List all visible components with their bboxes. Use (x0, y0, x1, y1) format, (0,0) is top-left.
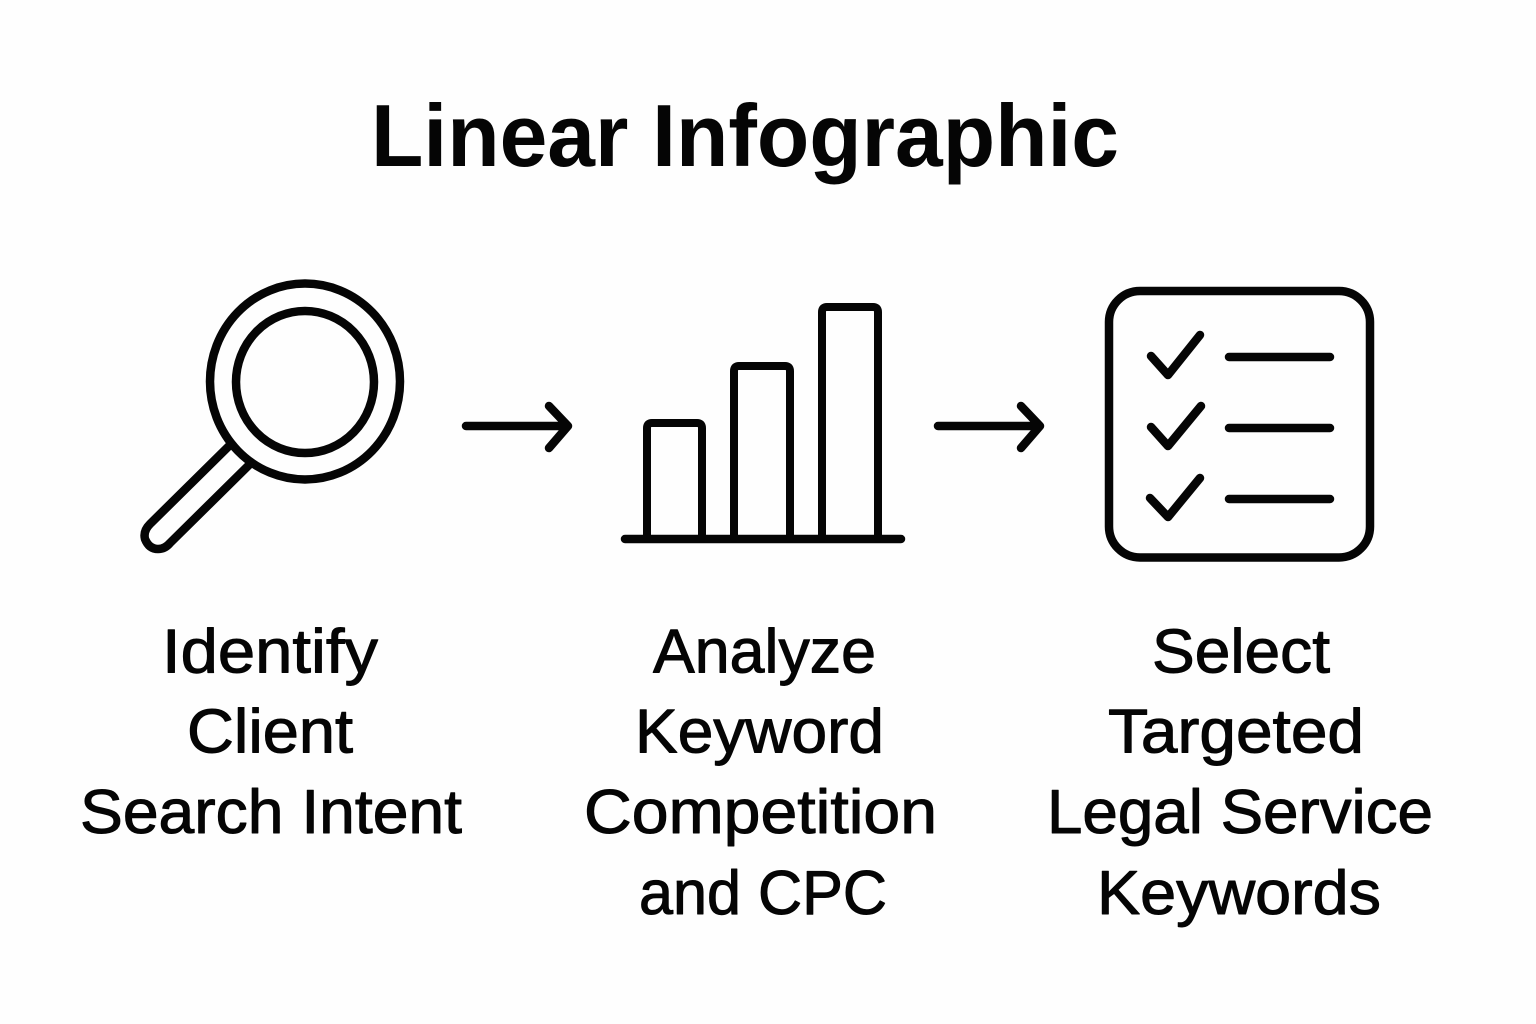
step 2 label: Analyze (653, 618, 876, 686)
step 2 label: Keyword (635, 698, 884, 766)
step 3 label (1047, 618, 1433, 928)
arrow: step 1 to step 2 (466, 406, 568, 448)
step 1 label (80, 618, 462, 847)
step 2 label: Competition (584, 778, 937, 847)
step 1 label: Identify (162, 618, 378, 686)
step 3 label: Targeted (1108, 698, 1364, 766)
icon: checklist (1109, 291, 1370, 558)
step 1 label: Client (187, 698, 353, 766)
step 3 label: Select (1152, 618, 1330, 686)
arrow: step 2 to step 3 (938, 406, 1040, 448)
icon: bar chart (625, 307, 901, 539)
step 2 label (584, 618, 937, 928)
step 3 label: Keywords (1097, 859, 1381, 928)
title: Linear Infographic (371, 86, 1119, 185)
step 1 label: Search Intent (80, 778, 462, 847)
step 2 label: and CPC (639, 859, 887, 928)
icon: magnifying glass (145, 284, 400, 549)
step 3 label: Legal Service (1047, 778, 1433, 847)
